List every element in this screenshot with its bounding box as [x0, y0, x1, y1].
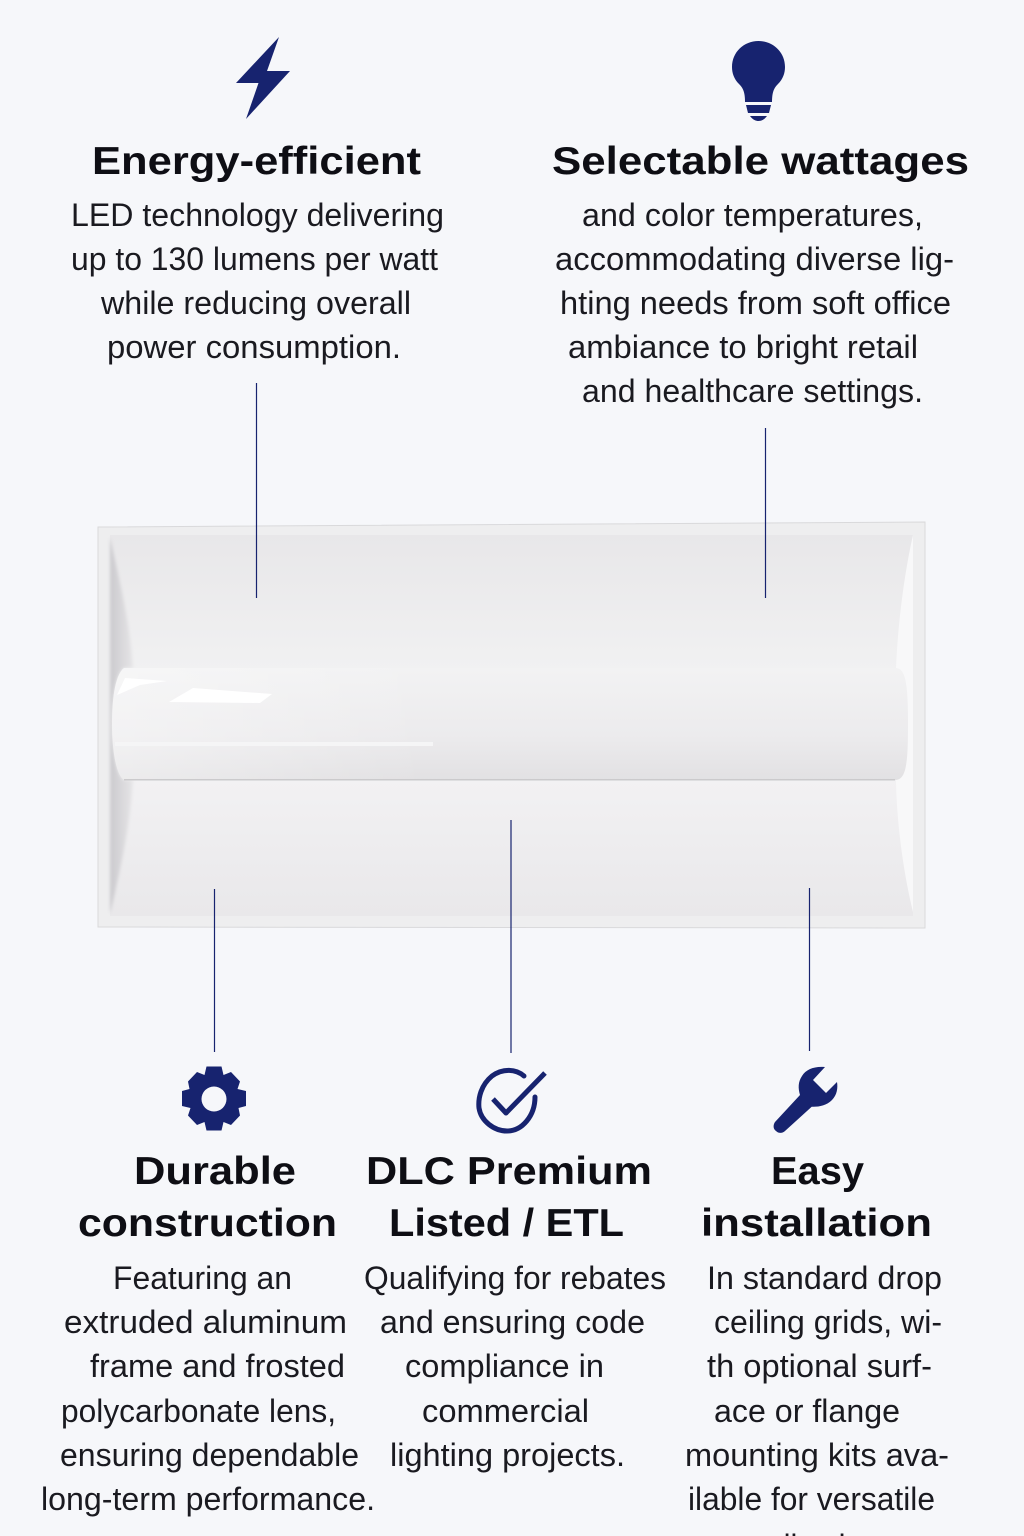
body text: compliance in: [405, 1348, 604, 1384]
feature: energy-efficient: [71, 140, 444, 365]
heading: DLC Premium: [366, 1150, 652, 1193]
body text: [364, 1260, 666, 1473]
heading: [78, 1150, 337, 1245]
body text: ceiling grids, wi-: [714, 1304, 942, 1340]
body text: lighting projects.: [390, 1437, 625, 1473]
feature: durable construction: [41, 1150, 375, 1517]
fixture lower reflector: [110, 780, 913, 916]
icon: wrench: [774, 1067, 837, 1133]
heading: Durable: [134, 1150, 296, 1193]
body text: and color temperatures,: [582, 197, 923, 233]
body text: polycarbonate lens,: [61, 1393, 336, 1429]
tube bottom edge: [124, 779, 895, 780]
body text: up to 130 lumens per watt: [71, 241, 438, 277]
heading: Easy: [771, 1150, 864, 1193]
feature: easy installation: [685, 1150, 949, 1536]
tube left glow: [112, 668, 430, 780]
body text: and healthcare settings.: [582, 373, 923, 409]
fixture upper reflector: [110, 535, 913, 670]
body text: hting needs from soft office: [560, 285, 951, 321]
icon: gear: [182, 1066, 246, 1130]
body text: while reducing overall: [100, 285, 411, 321]
body text: Featuring an: [113, 1260, 292, 1296]
central lens tube: [112, 668, 908, 780]
heading: Listed / ETL: [389, 1202, 624, 1245]
glossy highlight right: [169, 688, 272, 703]
feature: selectable wattages: [552, 140, 969, 409]
body text: frame and frosted: [90, 1348, 345, 1384]
body text: In standard drop: [707, 1260, 942, 1296]
body text: ensuring dependable: [60, 1437, 359, 1473]
body text: power consumption.: [107, 329, 401, 365]
tube streak: [115, 742, 433, 746]
body text: long-term performance.: [41, 1481, 375, 1517]
body text: [685, 1260, 949, 1536]
fixture outer frame: [98, 522, 925, 928]
callout line: easy installation: [808, 888, 810, 1051]
body text: ilable for versatile: [688, 1481, 935, 1517]
body text: [555, 197, 954, 409]
heading: installation: [701, 1202, 932, 1245]
heading: [366, 1150, 652, 1245]
body text: and ensuring code: [380, 1304, 645, 1340]
callout line: durable construction: [214, 889, 216, 1052]
body text: th optional surf-: [707, 1348, 932, 1384]
body text: LED technology delivering: [71, 197, 444, 233]
feature: DLC premium listed: [364, 1150, 666, 1473]
callout line: energy-efficient: [256, 383, 258, 598]
icon: light bulb: [732, 41, 785, 121]
body text: [41, 1260, 375, 1517]
icon: check mark circle: [479, 1070, 545, 1131]
right wedge highlight: [896, 535, 913, 912]
glossy highlight left: [117, 678, 167, 695]
panel: LED light fixture: [98, 522, 925, 928]
heading: construction: [78, 1202, 337, 1245]
callout line: DLC premium: [510, 820, 512, 1053]
body text: ambiance to bright retail: [568, 329, 918, 365]
body text: Qualifying for rebates: [364, 1260, 666, 1296]
body text: ace or flange: [714, 1393, 900, 1429]
callout line: selectable wattages: [764, 428, 766, 598]
heading: Energy-efficient: [92, 140, 421, 183]
body text: accommodating diverse lig-: [555, 241, 954, 277]
body text: extruded aluminum: [64, 1304, 347, 1340]
heading: Selectable wattages: [552, 140, 969, 183]
body text: mounting kits ava-: [685, 1437, 949, 1473]
icon: lightning bolt: [236, 37, 290, 119]
body text: [71, 197, 444, 365]
left wedge shadow: [110, 537, 133, 914]
body text: commercial: [422, 1393, 589, 1429]
heading: [701, 1150, 932, 1245]
